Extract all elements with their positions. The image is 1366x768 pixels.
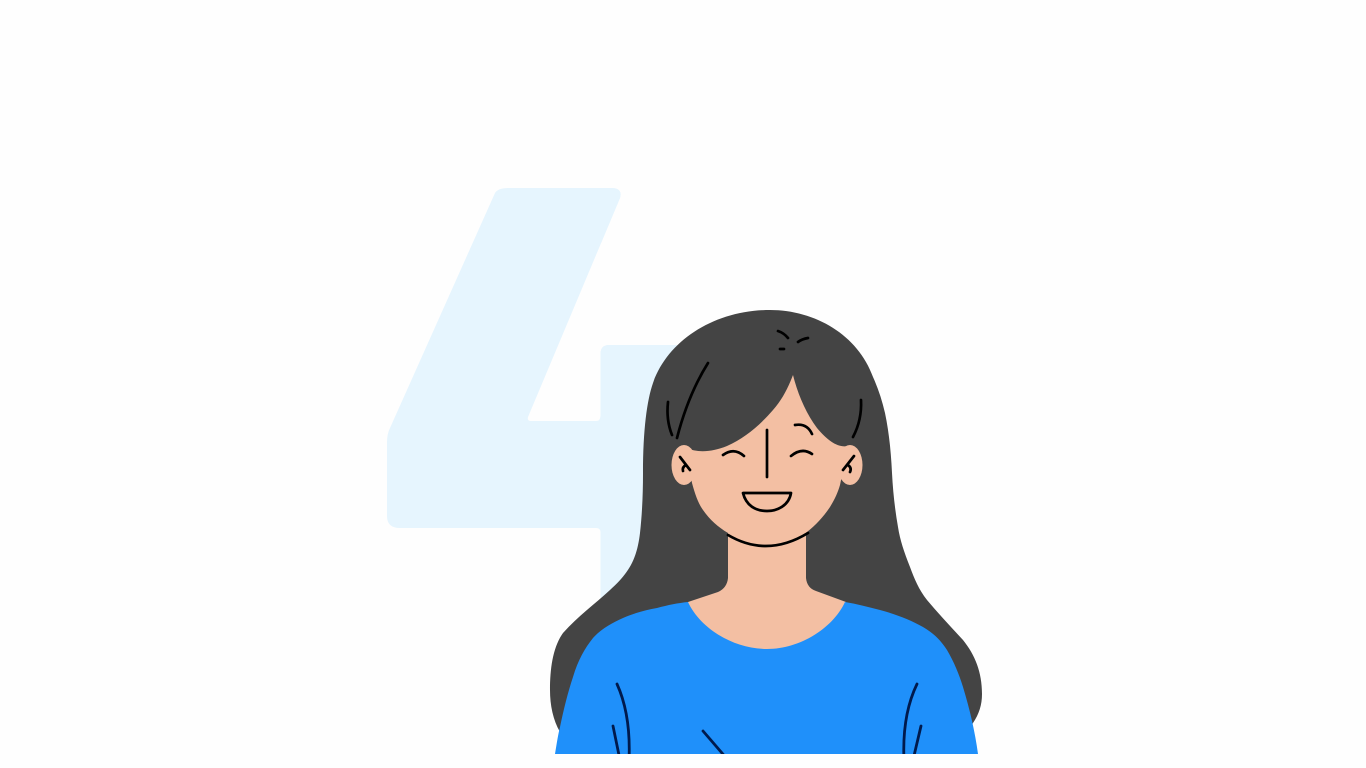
right ear [838, 445, 862, 485]
shirt fold lines [613, 684, 921, 760]
nose [766, 430, 768, 477]
right ear detail [843, 456, 854, 472]
right eyebrow [795, 425, 812, 434]
left sleeve fold [617, 684, 629, 760]
left eye [723, 451, 744, 456]
face [686, 375, 848, 546]
hair parting marks [778, 331, 808, 349]
left ear detail [680, 457, 690, 471]
left lower fold [613, 726, 620, 760]
infographic canvas [387, 188, 982, 754]
smiling mouth [743, 493, 791, 511]
centre fold [702, 730, 725, 754]
right eye [791, 451, 812, 456]
left ear [672, 445, 696, 485]
face line work [668, 331, 861, 546]
right hair strand [853, 400, 861, 437]
left hair strand [677, 363, 708, 438]
long hair [550, 310, 982, 752]
big pale number 4: 4 [438, 9, 714, 764]
right sleeve fold [904, 684, 917, 760]
right lower fold [913, 726, 921, 760]
neck [688, 520, 846, 660]
jaw line [728, 533, 808, 546]
blue shirt [555, 602, 978, 754]
left short strand [668, 402, 672, 435]
woman illustration [550, 310, 982, 760]
